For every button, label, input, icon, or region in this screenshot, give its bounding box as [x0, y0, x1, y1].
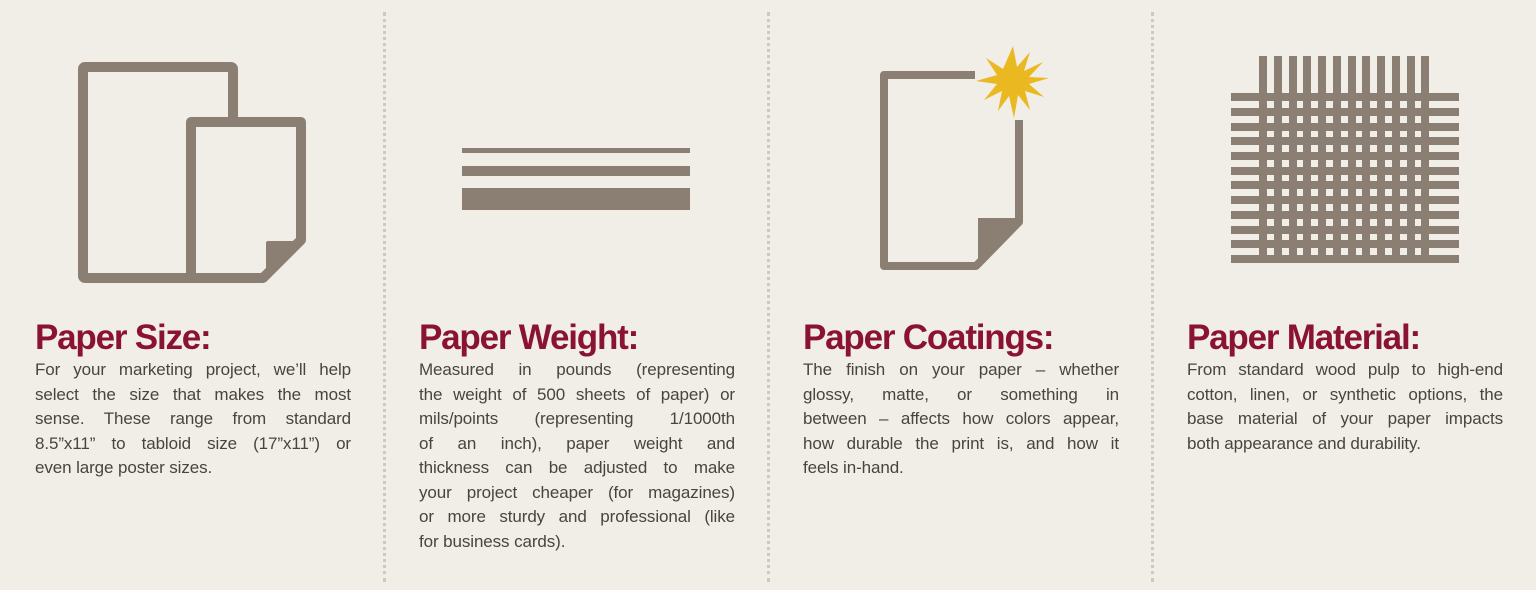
text block	[803, 360, 1119, 477]
text block: even large poster sizes.	[35, 458, 212, 477]
text block: cotton, linen, or synthetic options, the	[1187, 384, 1503, 404]
text block: how durable the print is, and how it	[803, 434, 1119, 452]
text block: between – affects how colors appear,	[803, 409, 1119, 428]
text block: base material of your paper impacts	[1187, 409, 1503, 428]
text block: 8.5”x11” to tabloid size (17”x11”) or	[35, 434, 351, 452]
heading: Paper Weight:	[419, 318, 638, 357]
panel: paper coatings	[803, 318, 1119, 477]
text block	[1187, 360, 1503, 452]
text block: Measured in pounds (representing	[419, 360, 735, 379]
heading: Paper Coatings:	[803, 318, 1053, 357]
text block: or more sturdy and professional (like	[419, 507, 735, 526]
text block: sense. These range from standard	[35, 409, 351, 428]
icon: paper coating	[884, 46, 1049, 266]
text block: glossy, matte, or something in	[803, 384, 1119, 404]
text block: both appearance and durability.	[1187, 434, 1421, 452]
heading: Paper Material:	[1187, 318, 1420, 357]
icon: paper sizes	[83, 67, 301, 278]
text block: your project cheaper (for magazines)	[419, 482, 735, 502]
icons	[78, 46, 1459, 283]
heading: Paper Size:	[35, 318, 210, 357]
panel: paper material	[1187, 318, 1503, 452]
panel: paper weight	[419, 318, 735, 550]
text block: thickness can be adjusted to make	[419, 458, 735, 477]
icon: weave	[1231, 56, 1459, 263]
text block: From standard wood pulp to high-end	[1187, 360, 1503, 379]
text block: mils/points (representing 1/1000th	[419, 409, 735, 428]
text block: of an inch), paper weight and	[419, 434, 735, 452]
text block	[35, 360, 351, 477]
icon: paper weight lines	[462, 148, 690, 210]
panel: paper size	[35, 318, 351, 477]
text block: for business cards).	[419, 532, 565, 550]
text block: For your marketing project, we’ll help	[35, 360, 351, 379]
text block: select the size that makes the most	[35, 384, 351, 404]
text block: the weight of 500 sheets of paper) or	[419, 384, 735, 404]
text block: The finish on your paper – whether	[803, 360, 1119, 379]
text block: feels in-hand.	[803, 458, 904, 477]
text block	[419, 360, 735, 550]
